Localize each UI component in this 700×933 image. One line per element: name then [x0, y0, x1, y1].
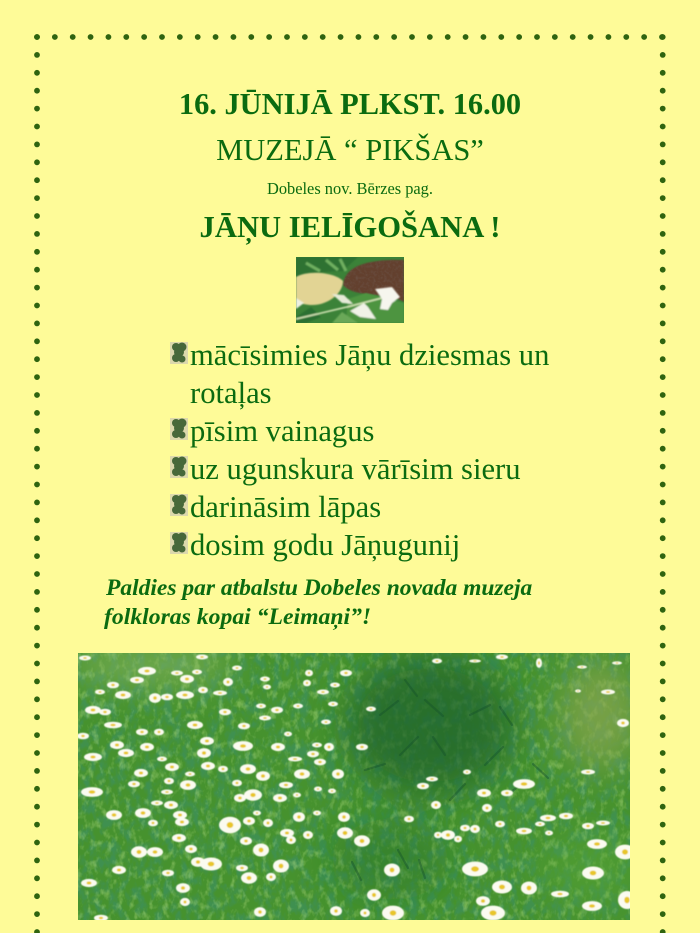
list item 3: uz ugunskura vārīsim sieru	[190, 452, 521, 486]
thanks line 1: Paldies par atbalstu Dobeles novada muzeja	[106, 575, 532, 601]
bullet icon	[170, 532, 188, 554]
bullet icon	[170, 418, 188, 440]
heading: venue: MUZEJĀ “ PIKŠAS”	[216, 133, 484, 167]
bullet icon	[170, 494, 188, 516]
list item 4: darināsim lāpas	[190, 490, 381, 524]
text: location: Dobeles nov. Bērzes pag.	[267, 179, 433, 198]
image: cheese and bread	[296, 257, 404, 323]
list item 1: mācīsimies Jāņu dziesmas un	[190, 338, 549, 372]
thanks line 2: folkloras kopai “Leimaņi”!	[104, 604, 371, 630]
list item 1 continued: rotaļas	[190, 376, 272, 410]
bullet icon	[170, 342, 188, 364]
heading: event title: JĀŅU IELĪGOŠANA !	[200, 210, 500, 244]
heading: date and time: 16. JŪNIJĀ PLKST. 16.00	[179, 87, 521, 121]
photo: daisy meadow	[78, 653, 630, 920]
bullet icon	[170, 456, 188, 478]
list item 5: dosim godu Jāņugunij	[190, 528, 460, 562]
list item 2: pīsim vainagus	[190, 414, 374, 448]
